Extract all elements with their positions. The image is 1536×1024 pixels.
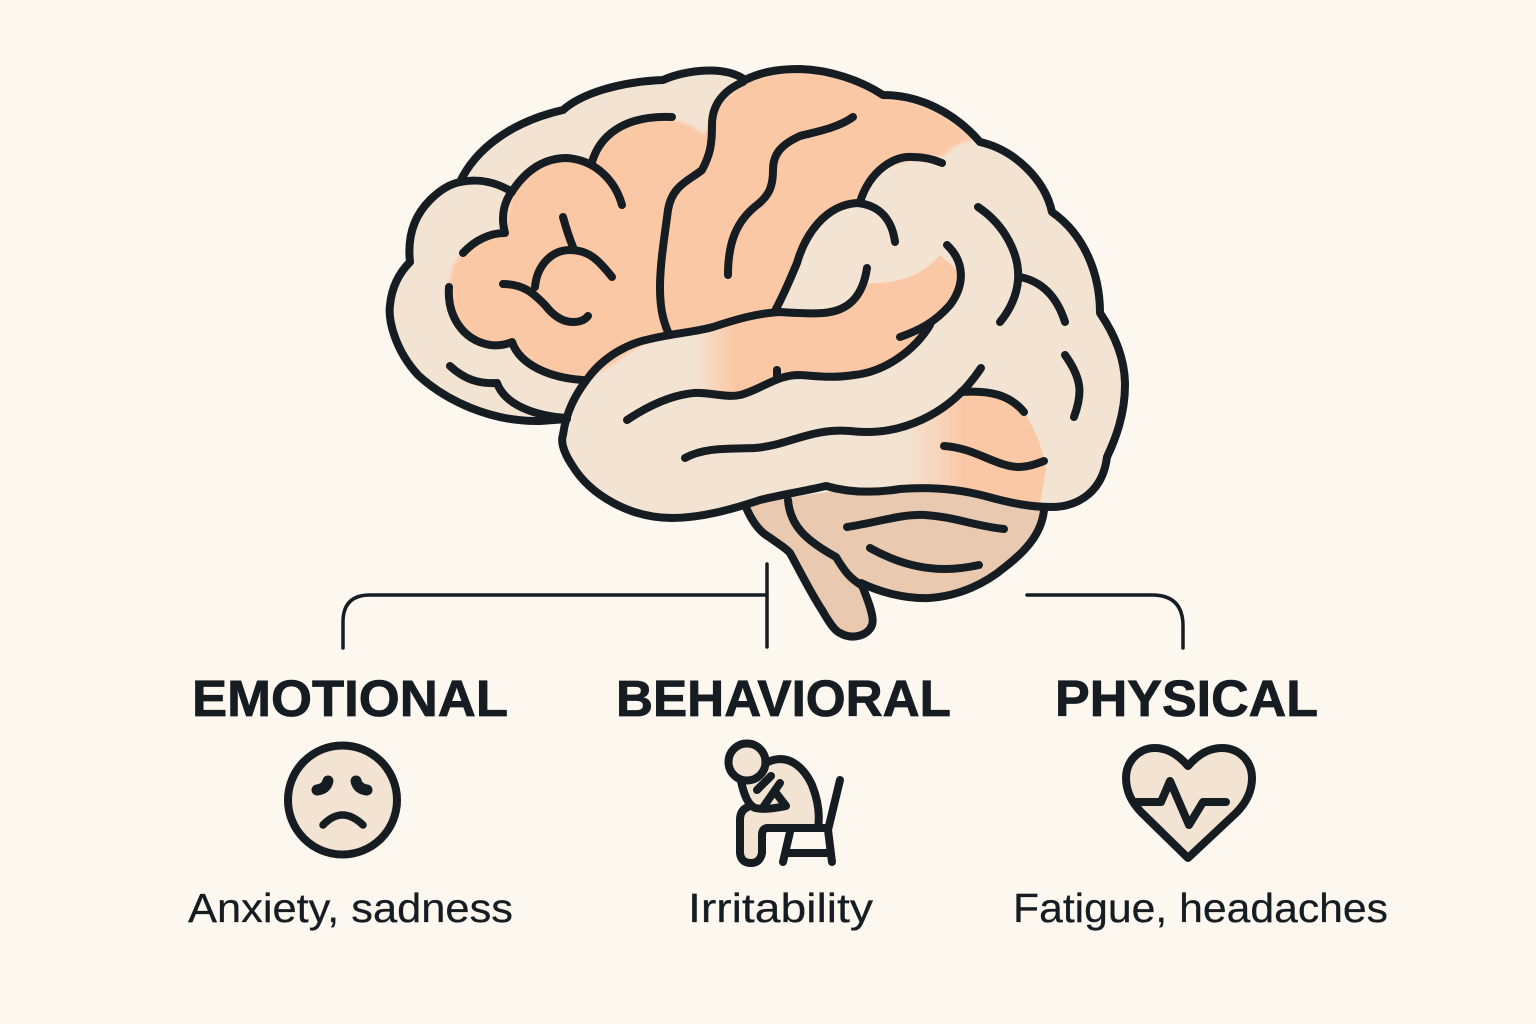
- icon: sad face: [288, 746, 397, 854]
- cerebellum and brain stem: [745, 480, 1044, 637]
- heading: behavioral: BEHAVIORAL: [616, 670, 951, 727]
- connector lines: [343, 564, 1183, 648]
- label: fatigue, headaches: Fatigue, headaches: [1013, 885, 1388, 931]
- brain base fill: [390, 69, 1125, 518]
- sulci and gyri lines: [449, 82, 1079, 467]
- heading: emotional: EMOTIONAL: [192, 670, 508, 727]
- peach frontal and parietal region: [449, 72, 973, 377]
- icon: heart with pulse: [1126, 748, 1252, 858]
- label: anxiety, sadness: Anxiety, sadness: [188, 885, 513, 931]
- heading: physical: PHYSICAL: [1055, 670, 1318, 727]
- peach lower temporal region: [905, 392, 1046, 503]
- icon: person sitting with head down: [728, 744, 840, 863]
- label: irritability: Irritability: [688, 885, 874, 931]
- peach temporal band: [695, 255, 960, 395]
- brain illustration: [390, 69, 1125, 637]
- brain outline stroke: [390, 69, 1125, 518]
